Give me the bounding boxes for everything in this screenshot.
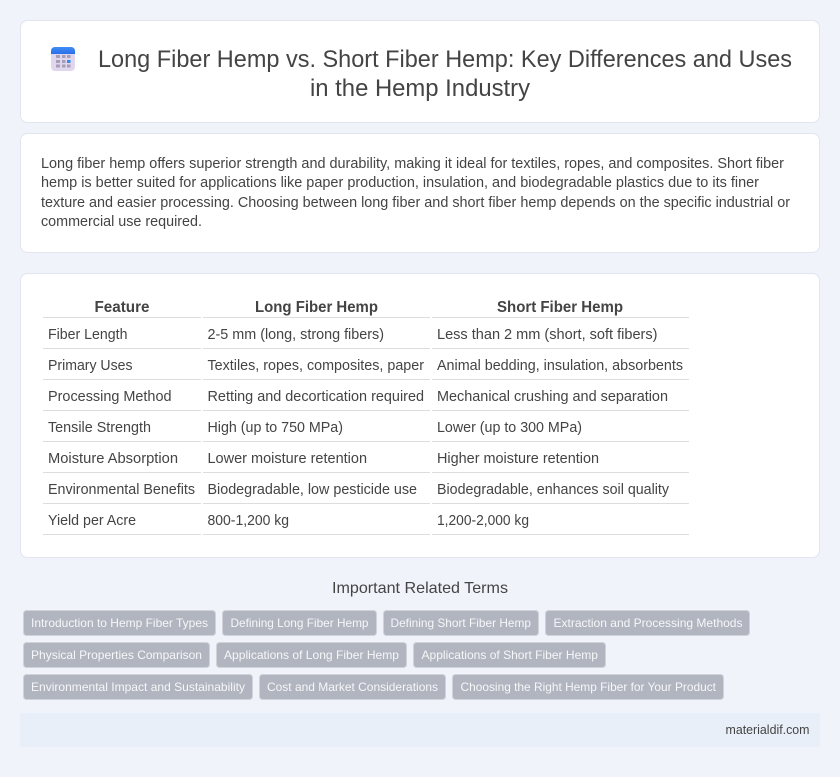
row: fiber length <box>48 327 658 343</box>
tag: introduction: Introduction to Hemp Fiber Types <box>31 616 208 630</box>
tag: introduction <box>24 610 216 636</box>
summary text: Long fiber hemp offers superior strength and durability, making it ideal for textiles, ropes, and composites. Short fiber <box>41 156 784 172</box>
title: in the Hemp Industry <box>310 75 530 102</box>
row: yield per acre: 1,200-2,000 kg <box>437 513 529 529</box>
heading: important related terms: Important Related Terms <box>332 580 508 597</box>
tag: choosing <box>452 674 724 700</box>
row: environmental benefits: Environmental Benefits <box>48 482 195 498</box>
row: environmental benefits: Biodegradable, low pesticide use <box>208 482 417 498</box>
row: moisture absorption <box>48 451 599 467</box>
row: primary uses <box>48 358 683 374</box>
row: primary uses: Textiles, ropes, composites, paper <box>208 358 424 374</box>
row: tensile strength: High (up to 750 MPa) <box>208 420 343 436</box>
tag: physical properties: Physical Properties Comparison <box>31 648 202 662</box>
row: moisture absorption: Lower moisture retention <box>208 451 367 467</box>
table header row: Feature <box>94 299 150 316</box>
table header row: Long Fiber Hemp <box>255 299 378 316</box>
tag: cost and market <box>260 674 446 700</box>
title <box>98 46 792 102</box>
footer source: materialdif.com <box>726 722 810 737</box>
related term tags <box>24 610 750 700</box>
title: Long Fiber Hemp vs. Short Fiber Hemp: Key Differences and Uses <box>98 46 792 73</box>
row: processing method: Retting and decortication required <box>208 389 424 405</box>
row: tensile strength: Lower (up to 300 MPa) <box>437 420 582 436</box>
row: yield per acre <box>48 513 529 529</box>
row: primary uses: Animal bedding, insulation, absorbents <box>437 358 683 374</box>
tag: extraction: Extraction and Processing Methods <box>554 616 742 630</box>
tag: defining long fiber <box>222 610 376 636</box>
row: processing method: Mechanical crushing and separation <box>437 389 668 405</box>
tag: environmental impact <box>24 674 252 700</box>
panel: title header <box>20 20 820 122</box>
icon: calendar <box>51 47 75 71</box>
tag: extraction <box>546 610 750 636</box>
panel: summary paragraph <box>20 134 820 252</box>
panel: comparison table <box>20 274 820 558</box>
tag: applications short <box>414 642 606 668</box>
tag: choosing: Choosing the Right Hemp Fiber for Your Product <box>460 680 717 694</box>
tag: defining short fiber <box>384 610 538 636</box>
tag: applications long <box>216 642 406 668</box>
table header row <box>94 299 623 316</box>
tag: environmental impact: Environmental Impact and Sustainability <box>31 680 245 694</box>
row: moisture absorption: Higher moisture retention <box>437 451 599 467</box>
row: fiber length: Fiber Length <box>48 327 128 343</box>
row: yield per acre: 800-1,200 kg <box>208 513 289 529</box>
row: environmental benefits <box>48 482 670 498</box>
tag: applications short: Applications of Short Fiber Hemp <box>422 648 598 662</box>
table header row: Short Fiber Hemp <box>497 299 623 316</box>
summary text: hemp is better suited for applications like paper production, insulation, and biodegradable plastics due to its finer <box>41 175 759 191</box>
row: processing method <box>48 389 668 405</box>
row: fiber length: 2-5 mm (long, strong fibers) <box>208 327 384 343</box>
footer bar <box>20 713 820 747</box>
summary text <box>41 156 790 230</box>
summary text: texture and easier processing. Choosing between long fiber and short fiber hemp depends on the specific industrial or <box>41 195 790 211</box>
summary text: commercial use required. <box>41 214 202 230</box>
row: moisture absorption: Moisture Absorption <box>48 451 178 467</box>
tag: physical properties <box>24 642 210 668</box>
tag: defining short fiber: Defining Short Fiber Hemp <box>390 616 531 630</box>
row: tensile strength: Tensile Strength <box>48 420 151 436</box>
tag: applications long: Applications of Long Fiber Hemp <box>224 648 399 662</box>
tag: cost and market: Cost and Market Considerations <box>267 680 438 694</box>
row: environmental benefits: Biodegradable, enhances soil quality <box>437 482 670 498</box>
row: primary uses: Primary Uses <box>48 358 132 374</box>
row: yield per acre: Yield per Acre <box>48 513 136 529</box>
row: tensile strength <box>48 420 582 436</box>
tag: defining long fiber: Defining Long Fiber Hemp <box>230 616 369 630</box>
row: processing method: Processing Method <box>48 389 172 405</box>
row: fiber length: Less than 2 mm (short, soft fibers) <box>437 327 658 343</box>
